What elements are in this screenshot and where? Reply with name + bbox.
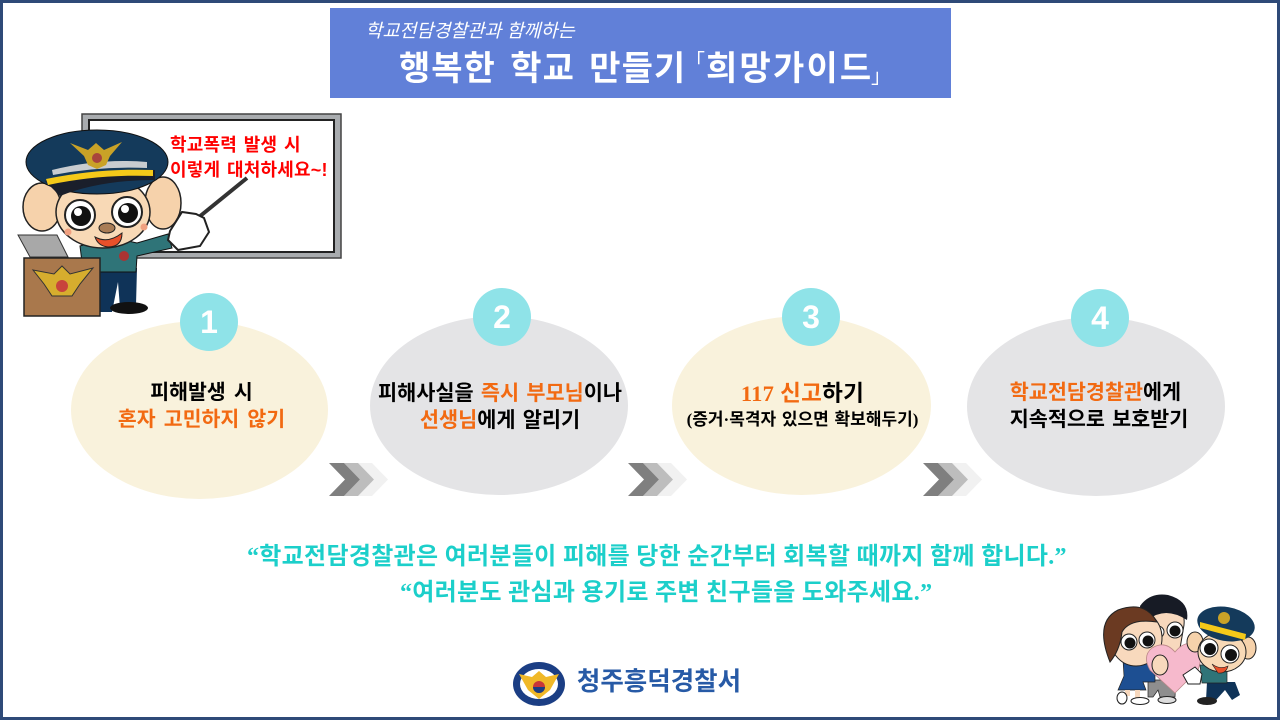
arrow: chevrons 1 xyxy=(329,463,388,496)
step number 1: 1 xyxy=(200,304,218,340)
speech text xyxy=(170,135,328,180)
step 2 text xyxy=(378,382,622,432)
speech text: 이렇게 대처하세요~! xyxy=(170,160,328,180)
step 3 text: (증거·목격자 있으면 확보해두기) xyxy=(687,410,918,429)
step number 3: 3 xyxy=(802,299,820,335)
subtitle: 학교전담경찰관과 함께하는 xyxy=(365,20,575,41)
step 4 text: 지속적으로 보호받기 xyxy=(1010,409,1188,431)
title: 「 xyxy=(685,51,705,73)
step 1 text: 피해발생 시 xyxy=(150,382,253,404)
step number 2: 2 xyxy=(493,299,511,335)
icon: police emblem xyxy=(513,662,565,706)
arrow: chevrons 2 xyxy=(628,463,686,496)
arrow: chevrons 3 xyxy=(923,463,982,496)
title: 」 xyxy=(871,66,891,88)
panel: step 2 xyxy=(370,288,628,495)
title: 희망가이드 xyxy=(706,50,873,88)
speech text: 학교폭력 발생 시 xyxy=(170,135,301,155)
step 4 text: 학교전담경찰관에게 xyxy=(1010,382,1181,404)
step number 3 xyxy=(782,288,840,346)
step 3 text: 117 신고하기 xyxy=(741,381,864,406)
step 1 text: 혼자 고민하지 않기 xyxy=(118,409,285,431)
quote message xyxy=(247,544,1067,606)
police station name: 청주흥덕경찰서 xyxy=(577,668,741,696)
quote message: “여러분도 관심과 용기로 주변 친구들을 도와주세요.” xyxy=(400,580,932,606)
panel: step 4 xyxy=(967,289,1225,496)
quote message: “학교전담경찰관은 여러분들이 피해를 당한 순간부터 회복할 때까지 함께 합니다.” xyxy=(247,544,1067,570)
title banner xyxy=(330,8,951,98)
panel: step 3 xyxy=(672,288,931,495)
icon: police mascot with podium xyxy=(17,130,210,317)
title xyxy=(399,50,891,88)
whiteboard with speech text xyxy=(81,113,342,259)
step 3 text xyxy=(687,381,918,429)
step 2 text: 선생님에게 알리기 xyxy=(420,409,580,432)
panel: step 1 xyxy=(71,293,328,499)
step 4 text xyxy=(1010,382,1188,431)
step number 2 xyxy=(473,288,531,346)
icon: children and police mascot with heart xyxy=(1103,594,1256,705)
step number 4 xyxy=(1071,289,1129,347)
step 1 text xyxy=(118,382,285,431)
title: 행복한 학교 만들기 xyxy=(399,50,686,88)
step number 4: 4 xyxy=(1091,300,1109,336)
step 2 text: 피해사실을 즉시 부모님이나 xyxy=(378,382,622,405)
step number 1 xyxy=(180,293,238,351)
